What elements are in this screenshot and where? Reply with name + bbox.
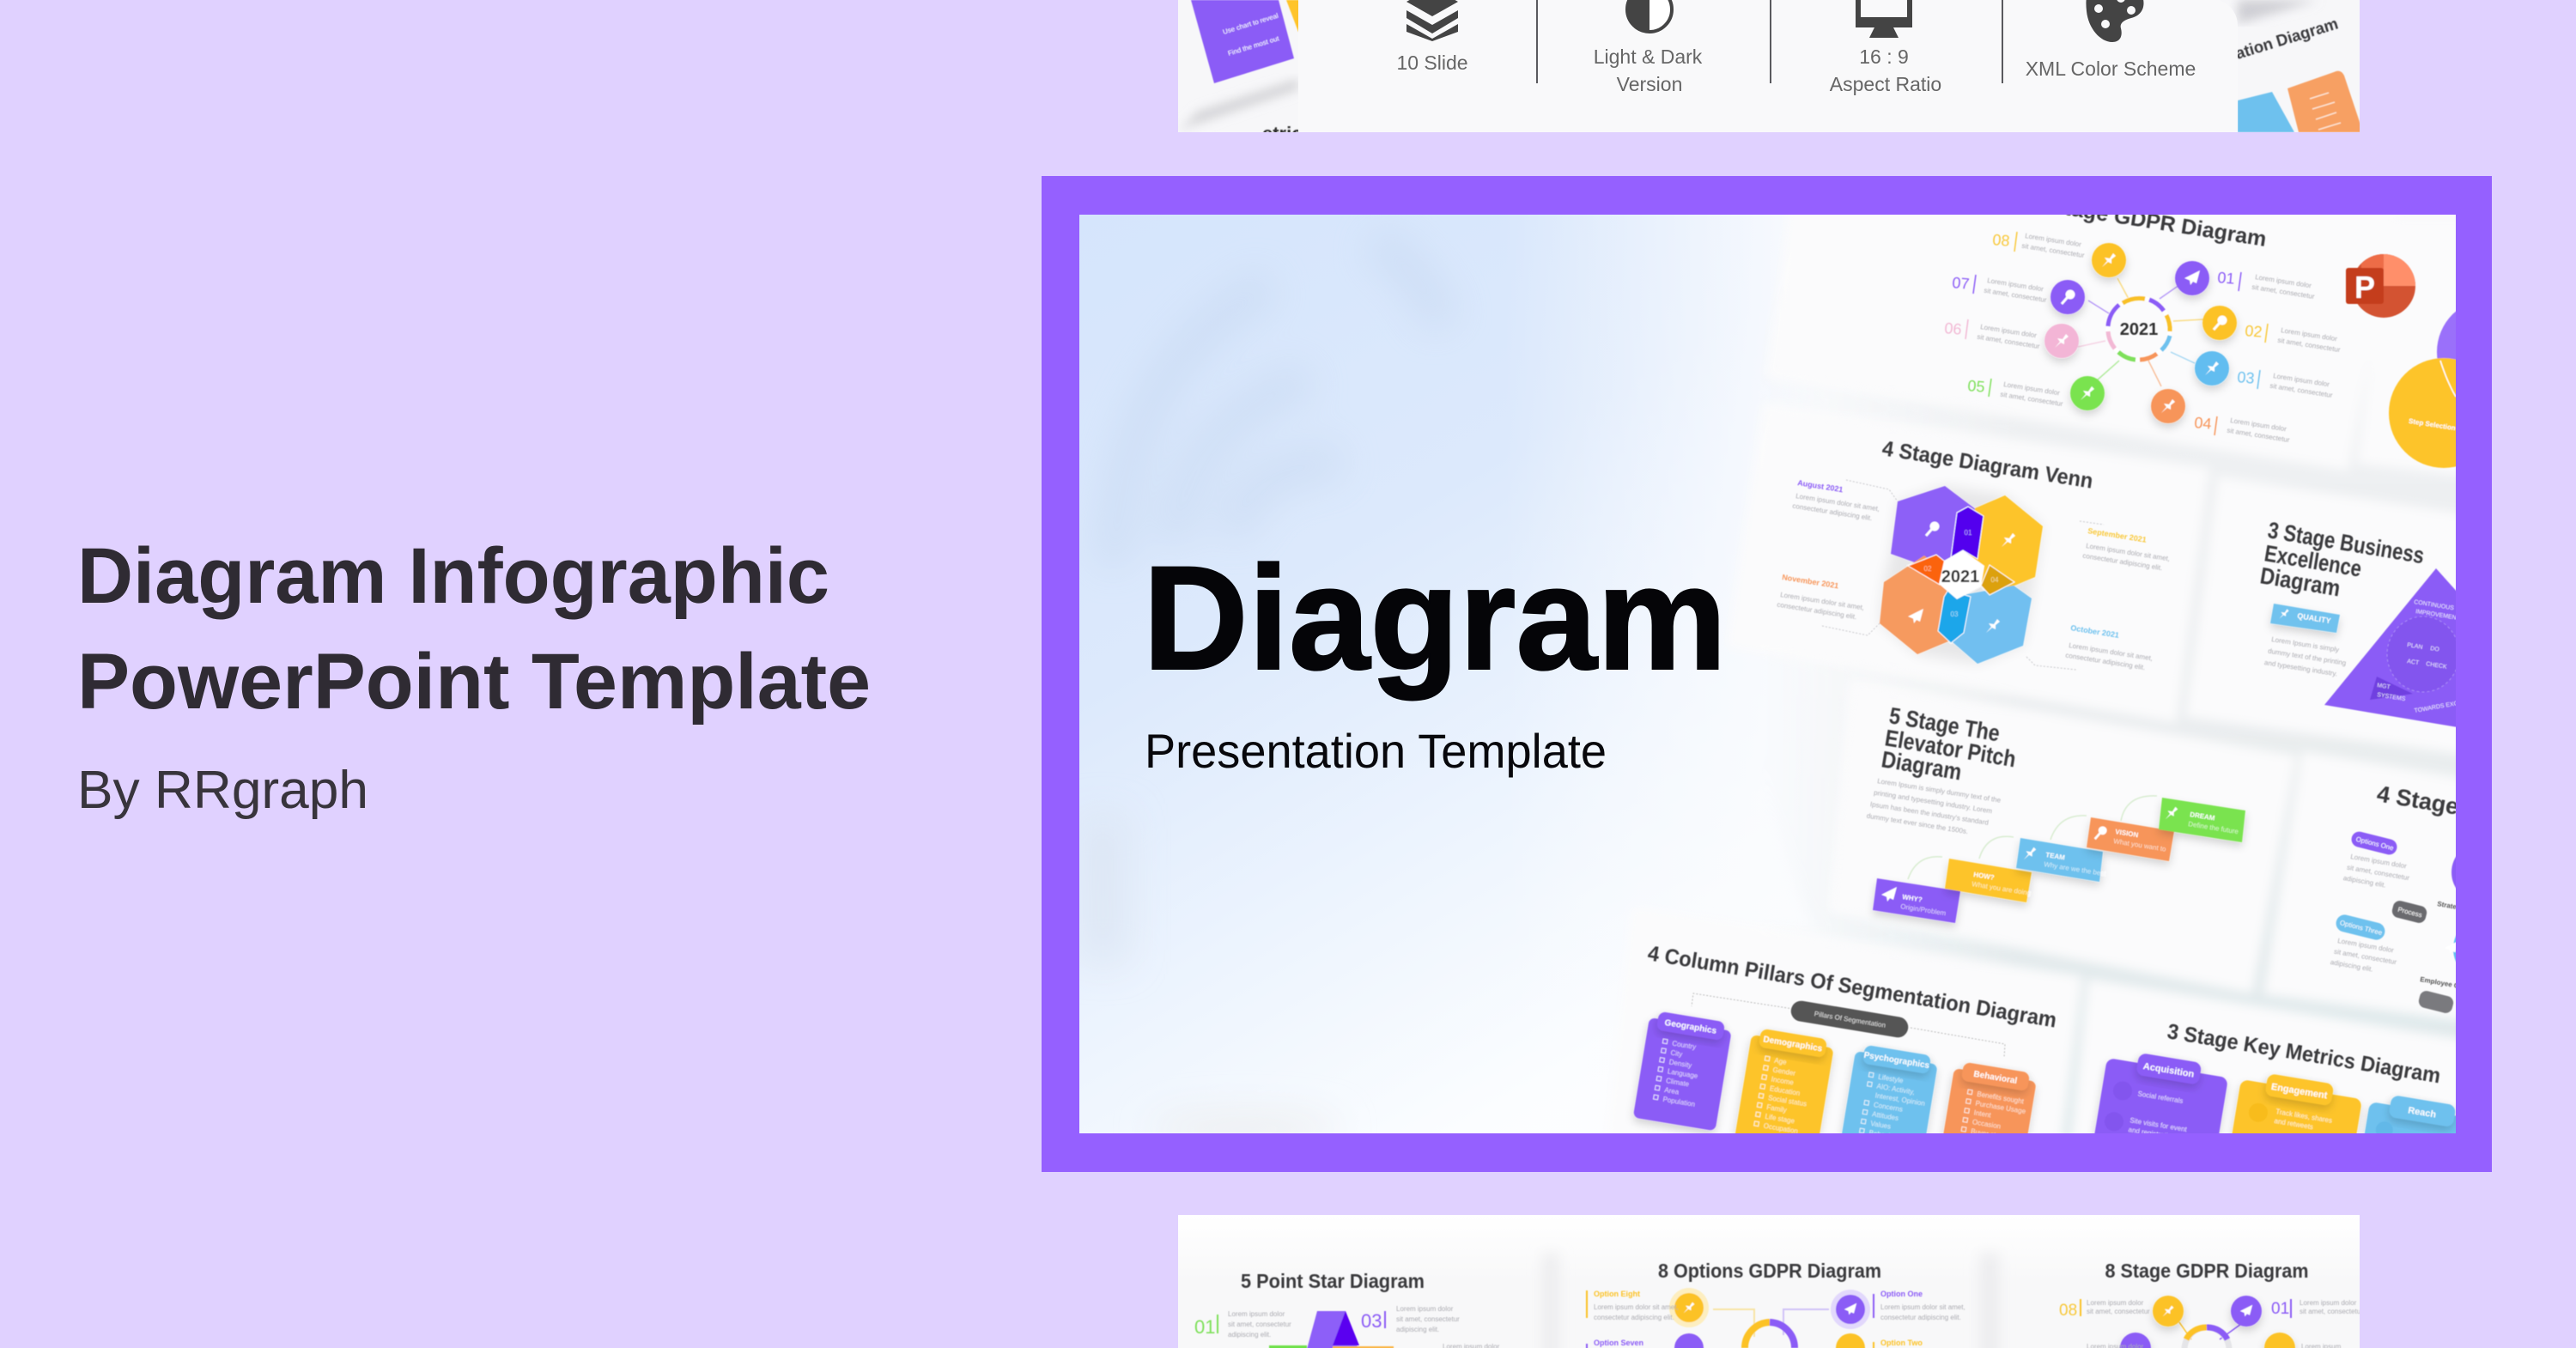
metric: acquisition xyxy=(2090,1047,2230,1180)
column: geographics: Geographics xyxy=(1664,1018,1717,1036)
step: vision: What you want to xyxy=(2113,837,2167,853)
number 01: 01 xyxy=(1194,1316,1215,1338)
card field shadow xyxy=(1842,409,2456,1133)
column: psychographics: AIO: Activity, xyxy=(1876,1083,1916,1096)
column: psychographics: Psychographics xyxy=(1863,1051,1930,1071)
option descriptions: consectetur adipiscing elit. xyxy=(1594,1314,1674,1321)
option labels xyxy=(1594,1290,1923,1347)
byline: By RRgraph xyxy=(77,761,368,820)
column: psychographics: Attitudes xyxy=(1871,1110,1899,1122)
dividers xyxy=(2081,1299,2291,1318)
stage descriptions: Lorem ipsum dolor xyxy=(2255,273,2312,289)
fade to white xyxy=(1583,215,1920,737)
metric: engagement xyxy=(2226,1069,2364,1193)
step: team: TEAM xyxy=(2045,851,2066,862)
option descriptions: Lorem ipsum dolor sit amet, xyxy=(1880,1303,1965,1311)
option labels: Option Seven xyxy=(1594,1339,1643,1347)
pyramid small triangle xyxy=(2370,677,2413,700)
connectors xyxy=(2179,1322,2241,1339)
circle outline xyxy=(2440,361,2456,397)
overlap: dark purple xyxy=(1951,507,1984,559)
option descriptions: Lorem ipsum dolor sit amet, xyxy=(1594,1303,1679,1311)
column: demographics: Social status xyxy=(1767,1094,1807,1108)
dividers xyxy=(1218,1311,1385,1333)
metric: reach: Reach xyxy=(2407,1105,2437,1120)
stage descriptions: Lorem ipsum dolor xyxy=(2273,372,2330,388)
column: demographics: Family xyxy=(1766,1103,1787,1114)
card gaps xyxy=(1543,1254,1999,1348)
column: demographics: Occupation xyxy=(1763,1122,1799,1135)
stage descriptions: sit amet, consectetur xyxy=(1977,333,2040,350)
stage numbers: 02 xyxy=(2245,322,2263,341)
heading: 8 Stage GDPR Diagram xyxy=(2105,1260,2308,1282)
stage descriptions xyxy=(1977,232,2342,444)
stage numbers xyxy=(1944,231,2263,433)
quality button xyxy=(2270,604,2340,633)
column: demographics: Age xyxy=(1774,1057,1788,1066)
description: Ipsum has been the industry's standard xyxy=(1869,800,1989,827)
pyramid labels: TOWARDS EXCELLENCE xyxy=(2414,695,2486,714)
icon: half circle xyxy=(1627,0,1672,32)
description: and typesetting industry. xyxy=(2263,659,2338,677)
column: psychographics: Interest, Opinion xyxy=(1874,1091,1925,1108)
centre ring xyxy=(2184,1327,2229,1348)
pillars pill: Pillars Of Segmentation xyxy=(1814,1010,1886,1029)
stage numbers: 08 xyxy=(1992,231,2010,250)
left slide fragment: Find the most out xyxy=(1227,34,1280,58)
column: psychographics: Lifestyle xyxy=(1878,1073,1905,1085)
metric: acquisition: Social referrals xyxy=(2137,1090,2184,1105)
Venn descriptions: consectetur adipiscing elit. xyxy=(2082,552,2163,572)
column: behavioral: Buyer stage xyxy=(1970,1127,2008,1141)
option text xyxy=(2330,852,2465,991)
step: how: What you are doing xyxy=(1971,880,2032,897)
option labels: Option Two xyxy=(1880,1339,1923,1347)
column: psychographics: Concerns xyxy=(1873,1101,1904,1114)
descriptions: Lorem ipsum dolor xyxy=(1228,1310,1285,1318)
slide: 8 options GDPR diagram xyxy=(1587,1260,1965,1348)
heading: 4 Stage Diagram Venn xyxy=(1880,436,2094,494)
heading line 2: Excellence xyxy=(2263,540,2363,582)
cover title: Diagram xyxy=(1143,536,1727,701)
overlap numbers xyxy=(1924,529,1999,618)
overlap: dark orange xyxy=(1908,555,1956,585)
heading: 5 Stage The xyxy=(1887,702,2002,746)
stage descriptions: sit amet, consectetur xyxy=(2000,391,2063,408)
heading: 8 Options GDPR Diagram xyxy=(1658,1260,1881,1282)
stage icons xyxy=(2163,1305,2252,1316)
icon: monitor xyxy=(1856,0,1912,38)
connector arcs xyxy=(1908,796,2157,879)
Venn labels: October 2021 xyxy=(2070,623,2120,640)
left slide fragment xyxy=(1185,0,1298,132)
column: geographics: Density xyxy=(1668,1058,1692,1070)
slide: 8 stage GDPR diagram xyxy=(2059,1260,2363,1348)
option pills: Process xyxy=(2397,906,2423,919)
numbers: 08 xyxy=(2059,1302,2077,1320)
pyramid xyxy=(2324,568,2473,730)
option pills: Options One xyxy=(2355,835,2395,853)
stage descriptions: sit amet, consectetur xyxy=(1984,287,2047,304)
column: demographics: Income xyxy=(1771,1075,1795,1087)
year: 2021 xyxy=(1941,568,1979,586)
slide: 5 point star diagram xyxy=(1194,1270,1500,1348)
descriptions: adipiscing elit. xyxy=(1228,1331,1271,1339)
pyramid labels: CONTINUOUS xyxy=(2414,599,2455,611)
column: geographics: City xyxy=(1670,1049,1683,1059)
column: demographics: Education xyxy=(1769,1084,1801,1097)
step: how xyxy=(1945,859,2032,902)
hexagon icons xyxy=(1908,522,2015,633)
stage descriptions: Lorem ipsum dolor xyxy=(1980,323,2038,339)
stage numbers: 06 xyxy=(1944,319,1962,338)
step: how: HOW? xyxy=(1973,871,1995,882)
stage numbers: 07 xyxy=(1952,274,1970,293)
icon: layers xyxy=(1406,0,1458,41)
number 03: 03 xyxy=(1361,1310,1382,1332)
hexagon: orange xyxy=(1880,556,1963,654)
step: dream: DREAM xyxy=(2190,811,2215,823)
column: psychographics: Behaviour xyxy=(1868,1129,1900,1142)
blurred window shadows xyxy=(1095,914,1283,1133)
feature label: aspect ratio: 16 : 9 xyxy=(1859,46,1909,68)
numbers: 01 xyxy=(2271,1300,2289,1318)
pyramid labels: CHECK xyxy=(2426,661,2447,671)
overlap numbers: 02 xyxy=(1924,565,1932,573)
stage numbers: 05 xyxy=(1967,377,1985,396)
column: geographics: Country xyxy=(1672,1040,1697,1051)
pyramid labels: SYSTEMS xyxy=(2377,692,2406,702)
descriptions: sit amet, consectetur xyxy=(2087,1308,2150,1315)
option text: Employee Ou xyxy=(2420,975,2464,991)
heading: 4 Stage Unified xyxy=(2375,780,2544,834)
heading: 4 Column Pillars Of Segmentation Diagram xyxy=(1646,941,2058,1033)
feature label: light and dark: Light & Dark xyxy=(1594,46,1703,68)
column: behavioral: Behavioral xyxy=(1973,1070,2018,1086)
feature dividers xyxy=(1537,0,2002,83)
blurred leaf shadows xyxy=(1112,240,1443,567)
descriptions: sit amet, consectetur xyxy=(2300,1308,2363,1315)
stage descriptions: sit amet, consectetur xyxy=(2021,242,2085,259)
card: 4 stage fragment xyxy=(2330,780,2544,1015)
Venn labels: September 2021 xyxy=(2087,526,2147,544)
slide area xyxy=(1079,215,2456,1133)
heading: 5 Point Star Diagram xyxy=(1241,1270,1425,1292)
Venn descriptions: Lorem ipsum dolor sit amet, xyxy=(1795,492,1880,513)
feature label: XML colour scheme: XML Color Scheme xyxy=(2026,58,2196,80)
feature label: 10 Slide: 10 Slide xyxy=(1396,52,1468,74)
step: why xyxy=(1873,878,1960,923)
column: behavioral: Benefits sought xyxy=(1977,1090,2025,1106)
column: demographics xyxy=(1733,1027,1835,1163)
left slide fragment: Use chart to reveal xyxy=(1222,12,1279,36)
overlap numbers: 04 xyxy=(1991,576,1999,584)
main framed slide xyxy=(1042,172,2544,1198)
option circles xyxy=(1669,1288,1870,1348)
Venn descriptions: consectetur adipiscing elit. xyxy=(1777,601,1857,621)
stage descriptions: Lorem ipsum dolor xyxy=(2281,326,2338,343)
stage dividers xyxy=(1965,232,2268,435)
option dividers xyxy=(1587,1290,1874,1348)
metric: engagement: and retweets xyxy=(2274,1117,2314,1131)
Venn descriptions: consectetur adipiscing elit. xyxy=(1792,502,1873,522)
step: vision xyxy=(2087,817,2174,861)
stage descriptions: Lorem ipsum dolor xyxy=(2025,232,2082,248)
description 03: adipiscing elit. xyxy=(1396,1326,1439,1333)
descriptions: sit amet, consectetur xyxy=(1228,1321,1291,1328)
metric: engagement: Engagement xyxy=(2270,1082,2328,1102)
description: dummy text ever since the 1500s. xyxy=(1866,812,1969,835)
heading line 3: Diagram xyxy=(2258,562,2342,601)
circle text: Step Selection xyxy=(2408,417,2456,432)
column: behavioral xyxy=(1939,1060,2038,1175)
card: venn circles fragment xyxy=(2389,299,2543,468)
Venn descriptions xyxy=(1777,492,2171,672)
option pills: Options Three xyxy=(2339,919,2384,937)
feature label: light and dark: Version xyxy=(1617,73,1682,95)
Venn descriptions: Lorem ipsum dolor sit amet, xyxy=(2086,542,2171,562)
left heading block xyxy=(77,532,871,820)
option descriptions: consectetur adipiscing elit. xyxy=(1880,1314,1961,1321)
card: 5 stage elevator pitch diagram xyxy=(1866,702,2245,923)
overlap numbers: 03 xyxy=(1951,610,1959,618)
descriptions: Lorem ipsum dolor xyxy=(2300,1299,2357,1307)
option text: sit amet, consectetur xyxy=(2333,948,2397,966)
stage descriptions: sit amet, consectetur xyxy=(2251,283,2315,301)
option text: Strategy xyxy=(2437,900,2465,913)
heading: 3 Stage Key Metrics Diagram xyxy=(2166,1019,2442,1089)
hexagon: purple xyxy=(1891,486,1984,566)
cover subtitle: Presentation Template xyxy=(1145,724,1607,778)
stage icons xyxy=(2055,253,2227,413)
option text: adipiscing elit. xyxy=(2342,874,2386,890)
option labels: Option One xyxy=(1880,1290,1923,1298)
Venn leader lines xyxy=(1822,480,2104,670)
powerpoint logo: P xyxy=(2354,270,2375,305)
blue circle xyxy=(2453,916,2518,981)
right slide fragment xyxy=(2225,0,2363,132)
column: geographics: Climate xyxy=(1665,1077,1690,1089)
description: Lorem Ipsum is simply xyxy=(2271,635,2340,653)
step: why: WHY? xyxy=(1902,893,1923,904)
stage circles xyxy=(2120,1296,2295,1348)
central feature panel xyxy=(1298,0,2238,132)
step: why: Origin/Problem xyxy=(1900,902,1947,917)
Venn descriptions: consectetur adipiscing elit. xyxy=(2065,652,2146,671)
metric: acquisition: Acquisition xyxy=(2142,1061,2195,1080)
slide background xyxy=(1079,215,1810,1133)
centre ring xyxy=(1745,1322,1795,1348)
hexagon shadow xyxy=(1880,486,2043,664)
title line 2: PowerPoint Template xyxy=(77,638,871,726)
strip backdrop xyxy=(1178,0,2360,132)
purple circle xyxy=(2437,299,2543,405)
stage circles xyxy=(2044,243,2237,423)
yellow circle xyxy=(2389,358,2499,468)
overlap numbers: 01 xyxy=(1965,529,1972,537)
Venn labels: August 2021 xyxy=(1797,478,1844,494)
connectors xyxy=(2078,278,2203,386)
star shapes xyxy=(1269,1311,1394,1348)
column: geographics: Population xyxy=(1662,1096,1696,1108)
option text: Lorem ipsum dolor xyxy=(2350,853,2408,871)
Venn labels: November 2021 xyxy=(1782,573,1839,590)
step: team: Why are we the best xyxy=(2044,860,2107,878)
pyramid labels: DO xyxy=(2430,646,2440,653)
icon: palette xyxy=(2086,0,2143,42)
stage descriptions: Lorem ipsum dolor xyxy=(2230,416,2287,433)
card: 8 stage GDPR diagram xyxy=(1944,191,2342,444)
description 03: sit amet, consectetur xyxy=(1396,1315,1460,1323)
column: behavioral: Occasion xyxy=(1971,1118,2002,1131)
Venn labels xyxy=(1782,478,2147,640)
step: dream: Define the future xyxy=(2188,820,2239,835)
Venn descriptions: Lorem ipsum dolor sit amet, xyxy=(2069,641,2154,662)
dotted connectors xyxy=(1692,993,2005,1058)
metric: acquisition: Site visits for event xyxy=(2129,1116,2188,1133)
card: 4 column pillars of segmentation diagram xyxy=(1633,941,2058,1175)
top preview strip xyxy=(1178,0,2363,144)
overlap: dark blue xyxy=(1938,590,1971,643)
stage descriptions: sit amet, consectetur xyxy=(2227,427,2290,444)
stage numbers: 03 xyxy=(2237,368,2255,387)
option text: sit amet, consectetur xyxy=(2346,864,2410,882)
left slide fragment: etric xyxy=(1262,123,1302,144)
description: printing and typesetting industry. Lorem xyxy=(1874,789,1993,815)
column: demographics: Gender xyxy=(1772,1066,1796,1078)
column: psychographics xyxy=(1838,1043,1939,1170)
description: dummy text of the printing xyxy=(2268,647,2347,667)
centre hexagon xyxy=(1939,550,1984,599)
card: 4 stage diagram venn xyxy=(1777,436,2171,672)
column: geographics: Language xyxy=(1667,1067,1698,1080)
pyramid labels xyxy=(2377,599,2486,714)
column: geographics: Area xyxy=(1664,1086,1680,1096)
connectors xyxy=(1713,1309,1829,1337)
column: demographics: Demographics xyxy=(1763,1035,1823,1054)
numbers xyxy=(2059,1300,2289,1320)
column: demographics: Life stage xyxy=(1765,1113,1795,1126)
stage descriptions: sit amet, consectetur xyxy=(2277,337,2341,354)
circles xyxy=(2451,842,2512,902)
step: team xyxy=(2016,838,2107,882)
central ring xyxy=(2108,298,2170,360)
option text: adipiscing elit. xyxy=(2330,958,2373,974)
year: 2021 xyxy=(2120,320,2158,339)
Venn descriptions: Lorem ipsum dolor sit amet, xyxy=(1780,591,1865,611)
heading: 8 Stage GDPR Diagram xyxy=(2031,191,2268,252)
feature label: aspect ratio: Aspect Ratio xyxy=(1830,73,1941,95)
column: behavioral: Purchase Usage xyxy=(1975,1100,2026,1115)
quality button: QUALITY xyxy=(2297,611,2331,625)
pyramid labels: ACT xyxy=(2407,659,2420,666)
stage descriptions: sit amet, consectetur xyxy=(2269,382,2333,399)
pyramid labels: IMPROVEMENT xyxy=(2415,609,2461,622)
heading line 3: Diagram xyxy=(1880,746,1964,785)
step: dream xyxy=(2159,798,2245,842)
bottom preview strip xyxy=(1178,1215,2363,1348)
column: behavioral: Intent xyxy=(1973,1108,1992,1120)
pyramid labels: MGT xyxy=(2377,683,2391,691)
metric: acquisition: and registration page xyxy=(2128,1126,2193,1144)
pillars pill xyxy=(1789,999,1910,1039)
descriptions: Lorem ipsum dolor xyxy=(2087,1299,2144,1307)
strip backdrop xyxy=(1178,1215,2360,1348)
pyramid inner disc xyxy=(2387,616,2459,692)
card: 3 stage business excellence diagram xyxy=(2258,517,2486,730)
column: psychographics: Values xyxy=(1870,1120,1892,1131)
pyramid labels: PLAN xyxy=(2407,642,2423,651)
overlap: dark yellow xyxy=(1981,565,2014,595)
option labels: Option Eight xyxy=(1594,1290,1640,1298)
option pills xyxy=(2334,830,2455,1015)
description 03: Lorem ipsum dolor xyxy=(1396,1305,1454,1313)
stage numbers: 01 xyxy=(2217,269,2235,288)
column: geographics xyxy=(1633,1010,1733,1131)
heading line 2: Elevator Pitch xyxy=(1883,725,2018,772)
hexagon: yellow xyxy=(1968,495,2043,595)
step: vision: VISION xyxy=(2115,828,2139,839)
option text: Lorem ipsum dolor xyxy=(2337,937,2395,955)
metric: reach xyxy=(2357,1091,2493,1198)
stage numbers: 04 xyxy=(2194,414,2212,433)
description: Lorem Ipsum is simply dummy text of the xyxy=(1877,777,2002,805)
option icons xyxy=(1684,1302,1856,1315)
title line 1: Diagram Infographic xyxy=(77,532,829,620)
powerpoint logo xyxy=(2346,254,2415,318)
stage descriptions: Lorem ipsum dolor xyxy=(1987,276,2044,293)
slide cards xyxy=(1832,220,2456,1133)
right slide fragment: cation Diagram xyxy=(2225,15,2341,66)
blue circle icon xyxy=(2445,941,2458,954)
purple frame xyxy=(1042,176,2492,1172)
heading: 3 Stage Business xyxy=(2266,517,2426,568)
card: 3 stage key metrics diagram xyxy=(2090,1019,2493,1198)
hexagon: blue xyxy=(1952,586,2032,664)
metric: engagement: Track likes, shares xyxy=(2275,1108,2333,1125)
stage descriptions: Lorem ipsum dolor xyxy=(2003,380,2061,397)
